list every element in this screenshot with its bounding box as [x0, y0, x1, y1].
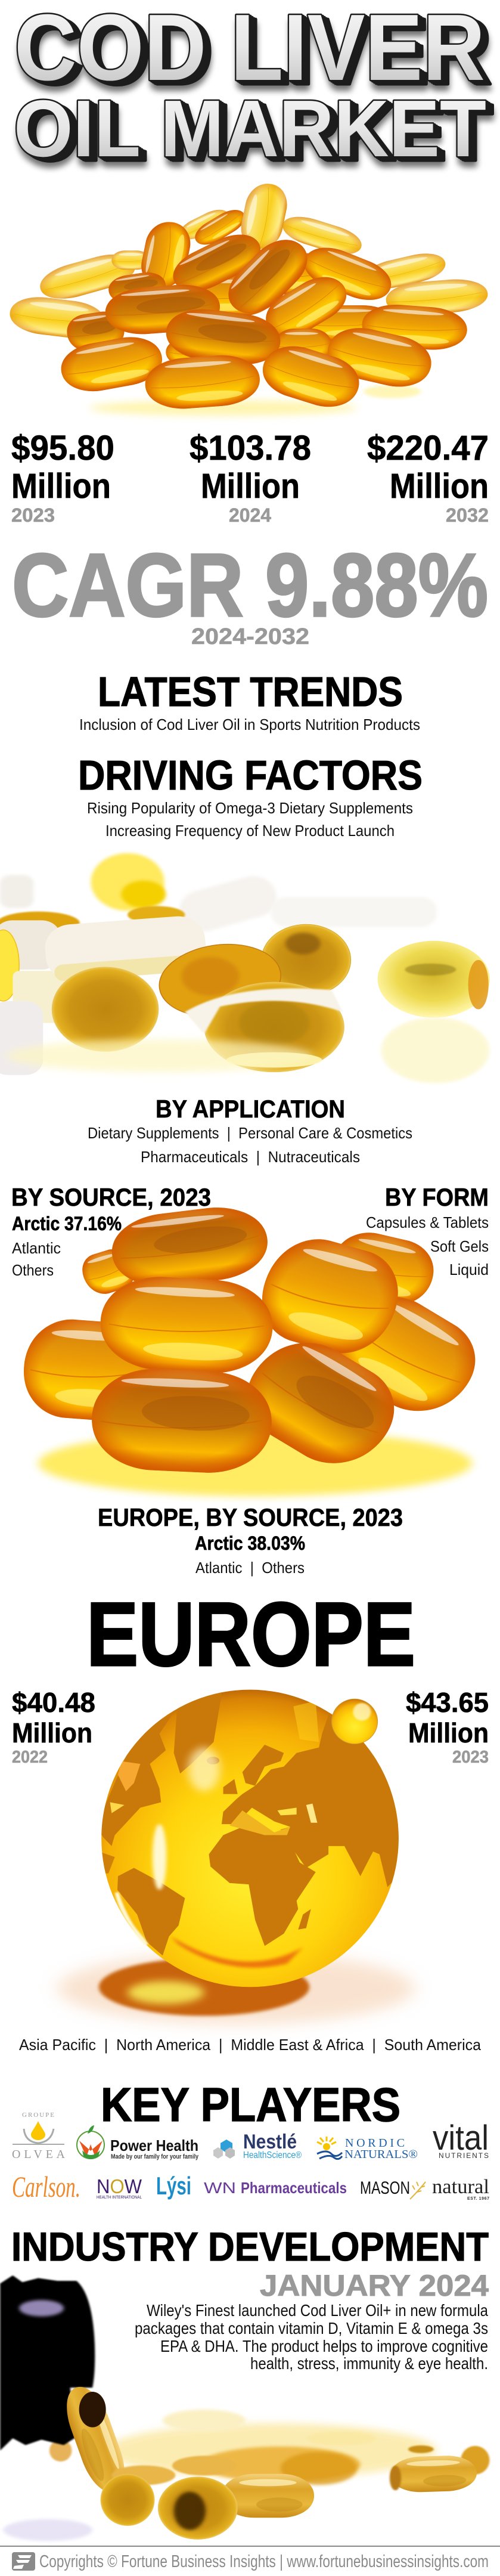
Europe by source: Atlantic | Others	[195, 1559, 305, 1577]
Europe heading: EUROPE	[86, 1584, 415, 1685]
legend: by source: Others	[12, 1261, 54, 1279]
Europe 2023 value: $43.65	[406, 1687, 489, 1718]
image: bottle spilling softgels	[0, 2275, 489, 2541]
image: pile of fish oil capsules	[7, 181, 489, 416]
logo: Nordic Naturals: NORDIC	[345, 2137, 405, 2150]
logo: Groupe Olvea	[12, 2111, 66, 2161]
Europe by source	[98, 1503, 403, 1577]
logo: Vital Nutrients: NUTRIENTS	[439, 2151, 489, 2160]
market size 2024: 2024	[229, 504, 271, 526]
logo: Carlson: Carlson.	[12, 2170, 80, 2203]
market size 2032: $220.47	[367, 429, 489, 467]
logo: Nestle Health Science	[213, 2131, 302, 2160]
market size 2032	[367, 429, 489, 526]
driving factors: Increasing Frequency of New Product Launch	[105, 822, 395, 840]
driving factors	[78, 752, 423, 840]
Europe 2022 value: 2022	[12, 1748, 48, 1767]
driving factors: DRIVING FACTORS	[78, 752, 423, 798]
CAGR: 2024-2032	[191, 624, 309, 649]
logo: Mason Natural: EST. 1967	[467, 2197, 489, 2201]
image: large softgel capsules	[19, 1202, 496, 1496]
Europe by source: EUROPE, BY SOURCE, 2023	[98, 1503, 403, 1531]
legend: by source: Arctic 37.16%	[12, 1213, 122, 1234]
driving factors: Rising Popularity of Omega-3 Dietary Supplements	[87, 799, 413, 817]
Europe 2023 value	[406, 1687, 489, 1767]
market size 2023: $95.80	[11, 429, 114, 467]
Europe 2022 value: $40.48	[12, 1687, 95, 1718]
image: golden oil globe	[57, 1685, 415, 2024]
logo: NOW Health International: NOW	[97, 2175, 142, 2197]
logo: Groupe Olvea: OLVEA	[12, 2148, 66, 2161]
latest trends	[79, 668, 420, 733]
logo: Mason Natural: MASON	[360, 2178, 410, 2198]
logo: Nordic Naturals	[317, 2137, 418, 2161]
development date: JANUARY 2024	[260, 2269, 489, 2302]
legend: by source	[11, 1183, 211, 1279]
footer divider	[0, 2546, 500, 2547]
logo: WN Pharmaceuticals: WN	[204, 2179, 236, 2197]
legend: by form: Soft Gels	[430, 1237, 489, 1255]
key players heading: KEY PLAYERS	[101, 2078, 400, 2131]
logo: Nordic Naturals: NATURALS®	[344, 2148, 418, 2161]
Europe 2022 value	[12, 1687, 95, 1767]
legend: by form: BY FORM	[385, 1183, 489, 1211]
logo: Nestle Health Science: HealthScience®	[243, 2150, 302, 2160]
logo: NOW Health International: HEALTH INTERNATIONAL	[97, 2196, 142, 2200]
latest trends: Inclusion of Cod Liver Oil in Sports Nutrition Products	[79, 716, 420, 733]
image: softgels and white tablets	[0, 853, 490, 1083]
legend: by form: Capsules & Tablets	[366, 1213, 489, 1231]
logo: Power Health: Made by our family for your family	[111, 2153, 199, 2160]
logo: WN Pharmaceuticals: Pharmaceuticals	[241, 2179, 347, 2197]
by application	[88, 1095, 412, 1166]
market size 2024	[190, 429, 311, 526]
legend: by form	[366, 1183, 489, 1278]
legend: by source: BY SOURCE, 2023	[11, 1183, 211, 1211]
legend: by source: Atlantic	[12, 1239, 61, 1257]
logo: Nestle Health Science: Nestlé	[243, 2131, 297, 2153]
latest trends: LATEST TRENDS	[98, 668, 403, 715]
logo: Lysi: Lýsi	[156, 2172, 191, 2200]
by application: Pharmaceuticals | Nutraceuticals	[141, 1148, 360, 1166]
legend: by form: Liquid	[449, 1261, 489, 1278]
other regions: Asia Pacific | North America | Middle East & Africa | South America	[19, 2036, 482, 2054]
logo: Groupe Olvea: GROUPE	[22, 2111, 54, 2119]
logo: WN Pharmaceuticals	[204, 2179, 347, 2197]
logo: Power Health	[77, 2125, 199, 2160]
market size 2032: Million	[390, 467, 489, 506]
Europe by source: Arctic 38.03%	[195, 1532, 305, 1554]
Europe 2023 value: Million	[408, 1717, 489, 1748]
market size 2023: 2023	[11, 504, 55, 526]
logo: Power Health: Power Health	[110, 2137, 198, 2154]
Europe 2022 value: Million	[12, 1717, 92, 1748]
market size 2032: 2032	[446, 504, 489, 526]
development description	[135, 2301, 488, 2373]
title	[14, 0, 486, 174]
by application: BY APPLICATION	[156, 1095, 345, 1123]
market size 2024: Million	[201, 467, 300, 506]
market size 2023: Million	[11, 467, 111, 506]
title: OIL MARKET	[14, 83, 486, 174]
logo: Mason Natural: natural	[432, 2176, 489, 2198]
market size 2023	[11, 429, 114, 526]
logo: Mason Natural	[360, 2176, 489, 2201]
Europe 2023 value: 2023	[452, 1748, 489, 1767]
by application: Dietary Supplements | Personal Care & Cosmetics	[88, 1124, 412, 1142]
logo: Vital Nutrients: vital	[433, 2119, 489, 2157]
market size 2024: $103.78	[190, 429, 311, 467]
icon: Fortune Business Insights logo	[12, 2552, 35, 2571]
